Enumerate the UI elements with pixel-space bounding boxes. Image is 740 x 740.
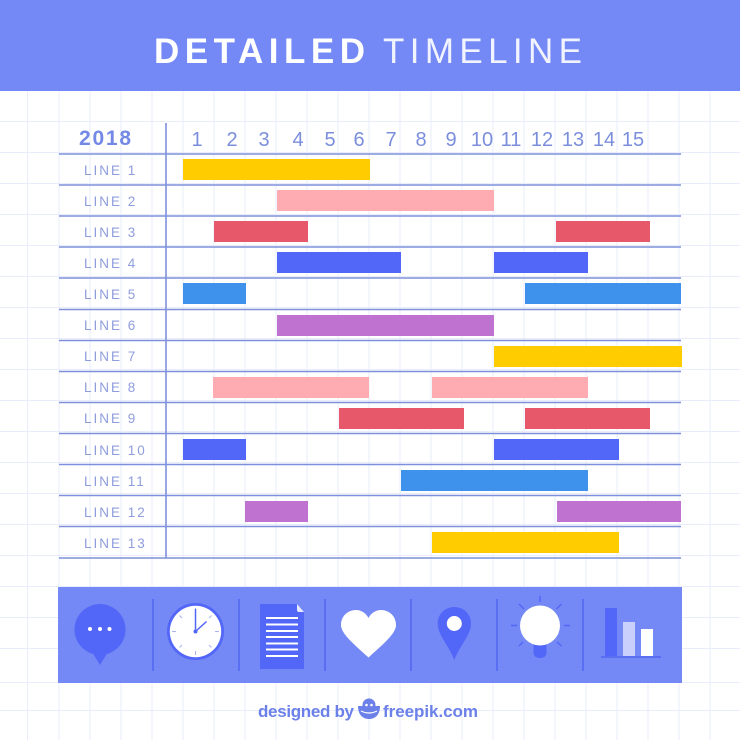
icon: bar chart [601, 608, 661, 657]
year label: 2018 [79, 127, 131, 150]
row labels: LINE 12 [84, 505, 147, 520]
row labels: LINE 4 [84, 256, 137, 271]
icon: document [260, 604, 304, 669]
icon: heart [341, 610, 396, 658]
icon: map pin [438, 607, 471, 660]
row labels: LINE 9 [84, 411, 137, 426]
icon: light bulb [511, 596, 570, 658]
title [154, 32, 582, 71]
icon: freepik mascot [358, 698, 380, 719]
month axis numbers: 13 [562, 129, 584, 151]
row labels: LINE 8 [84, 380, 137, 395]
month axis numbers: 1 [191, 129, 203, 151]
row labels: LINE 10 [84, 443, 147, 458]
month axis numbers: 9 [445, 129, 457, 151]
row labels: LINE 1 [84, 163, 137, 178]
month axis numbers: 12 [531, 129, 553, 151]
month axis numbers: 15 [622, 129, 644, 151]
row labels: LINE 13 [84, 536, 147, 551]
month axis numbers: 6 [353, 129, 365, 151]
icon: clock [167, 603, 224, 660]
month axis numbers: 14 [593, 129, 615, 151]
header banner [0, 0, 740, 91]
month axis numbers: 4 [292, 129, 304, 151]
gantt chart [59, 123, 682, 558]
month axis numbers: 11 [501, 129, 521, 151]
row labels [84, 163, 147, 551]
title: DETAILED [154, 32, 365, 71]
month axis numbers: 8 [415, 129, 427, 151]
month axis numbers: 7 [385, 129, 397, 151]
row labels: LINE 7 [84, 349, 137, 364]
row labels: LINE 11 [84, 474, 146, 489]
footer credit: designed by [258, 702, 355, 721]
row labels: LINE 3 [84, 225, 137, 240]
bars [183, 159, 682, 553]
row labels: LINE 2 [84, 194, 137, 209]
footer credit: freepik.com [383, 702, 478, 721]
month axis numbers: 3 [258, 129, 270, 151]
row labels: LINE 5 [84, 287, 137, 302]
icon: speech bubble [74, 604, 126, 665]
title: TIMELINE [383, 32, 582, 71]
icon panel [58, 587, 682, 683]
month axis numbers [191, 129, 644, 151]
row labels: LINE 6 [84, 318, 137, 333]
month axis numbers: 2 [226, 129, 238, 151]
month axis numbers: 10 [471, 129, 493, 151]
footer credit [258, 698, 478, 721]
month axis numbers: 5 [324, 129, 336, 151]
